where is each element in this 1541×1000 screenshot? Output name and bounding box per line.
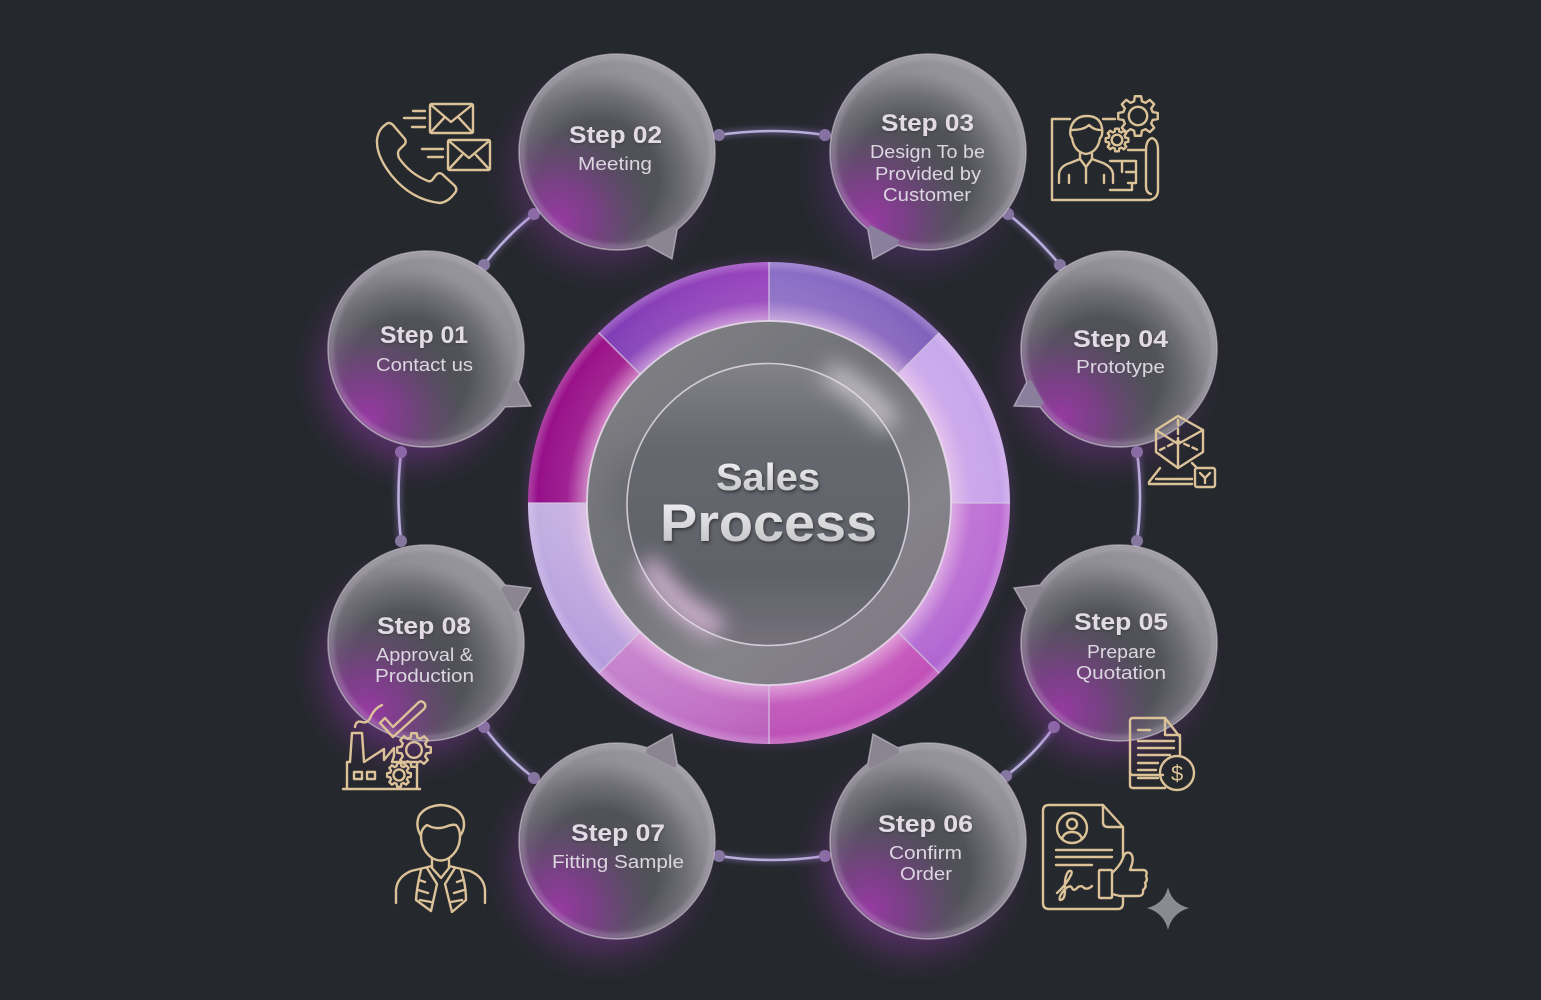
central donut: Sales Process [526,260,1012,746]
bubble: Step 07 Fitting Sample: Step 07 [571,820,665,847]
bubble: Step 07 Fitting Sample [515,734,715,952]
middle glass ring [587,321,951,685]
icon: quotation document with dollar: $ [1171,761,1183,786]
bubble: Step 01 Contact us: Contact us [376,355,473,375]
icon: factory with approval check [343,701,431,789]
bubble: Step 07 Fitting Sample: Fitting Sample [552,852,684,872]
bubble: Step 02 Meeting: Step 02 [569,122,662,149]
title [660,457,877,553]
bubble: Step 06 Confirm Order: Step 06 [878,811,973,838]
bubble: Step 06 Confirm Order [826,734,1026,952]
bubble: Step 08 Approval & Production: Production [375,666,474,686]
icon: phone and envelopes [377,104,490,203]
bubble: Step 01 Contact us [324,251,531,460]
icon: tailor with measuring tape [396,805,485,912]
bubble: Step 04 Prototype [1014,251,1217,460]
connector ring between steps [395,129,1143,862]
bubble: Step 04 Prototype: Step 04 [1073,326,1169,353]
bubble: Step 02 Meeting: Meeting [578,154,652,174]
icon: signed document with thumbs up [1043,805,1147,909]
bubble: Step 04 Prototype: Prototype [1076,357,1165,377]
title: Process [660,494,877,553]
icon: quotation document with dollar [1130,718,1194,790]
bubble: Step 08 Approval & Production: Approval & [376,645,473,665]
inner core circle [627,364,909,646]
bubble: Step 03 Design To be Provided by Customer [826,54,1026,263]
ring segments [528,262,1010,744]
bubble: Step 05 Prepare Quotation: Step 05 [1074,609,1168,636]
bubble: Step 03 Design To be Provided by Customer: Design To be [870,142,985,162]
icon: sparkle [1147,887,1189,930]
bubble: Step 08 Approval & Production [324,545,531,754]
bubble: Step 03 Design To be Provided by Customer: Customer [883,185,971,205]
bubble: Step 06 Confirm Order: Order [900,864,952,884]
bubble: Step 06 Confirm Order: Confirm [889,843,962,863]
bubble: Step 01 Contact us: Step 01 [380,322,468,349]
bubble: Step 02 Meeting [515,54,715,263]
bubble: Step 03 Design To be Provided by Customer: Step 03 [881,110,974,137]
bubble: Step 05 Prepare Quotation: Prepare [1087,642,1156,662]
icon: designer with blueprint and gears [1052,96,1158,200]
title: Sales [716,457,820,499]
icon: prototype cube [1149,416,1215,487]
bubble: Step 05 Prepare Quotation: Quotation [1076,663,1166,683]
bubble: Step 03 Design To be Provided by Customer: Provided by [875,164,981,184]
bubble: Step 08 Approval & Production: Step 08 [377,613,471,640]
bubble: Step 05 Prepare Quotation [1014,545,1217,754]
